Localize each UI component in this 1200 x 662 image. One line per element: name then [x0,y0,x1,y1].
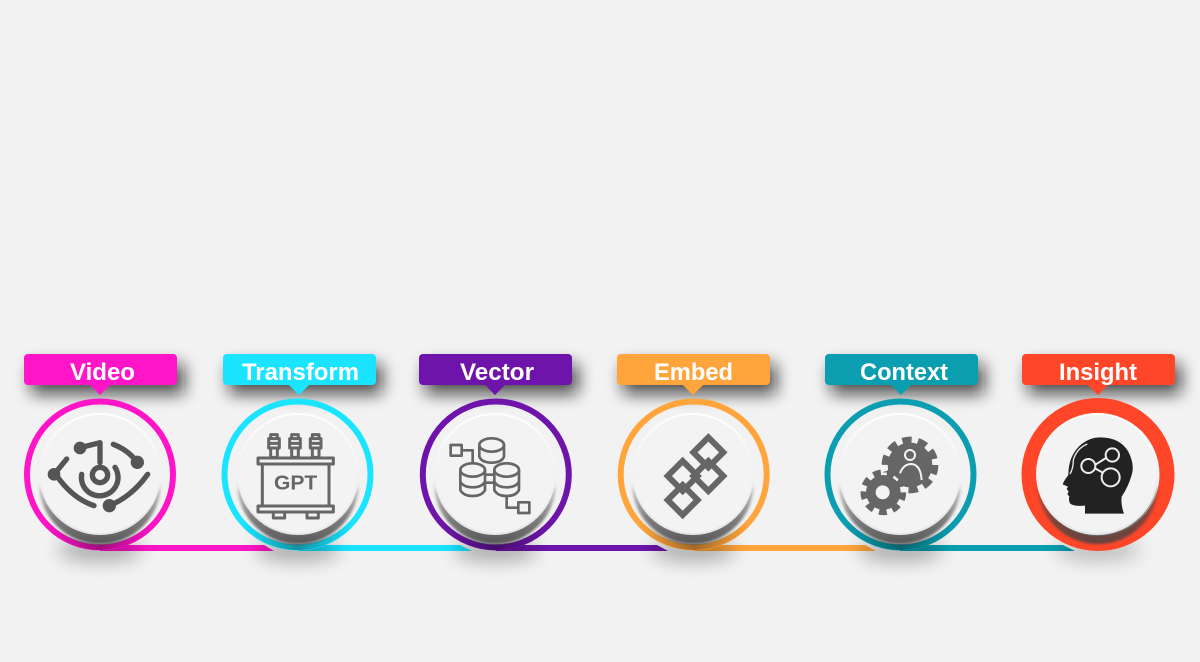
label: Vector: Vector [460,359,534,386]
step: Vector [419,354,578,561]
step: Embed [617,354,776,561]
icon: GPT transformer: GPT [274,471,318,494]
label: Insight: Insight [1059,359,1137,386]
icon: gears with person [863,440,935,512]
connector: magenta line [100,545,274,551]
step: Context [825,354,984,561]
label: Video: Video [70,359,135,386]
step: Transform [223,354,382,561]
connector: cyan line [298,545,472,551]
connector: orange line [694,545,876,551]
label: Transform: Transform [242,359,359,386]
step: Insight [1022,354,1181,561]
connector: purple line [496,545,668,551]
label: Embed: Embed [654,359,733,386]
icon: eye [48,442,148,512]
step: Video [24,354,184,561]
icon: chain of diamonds [668,437,723,515]
label: Context: Context [860,359,948,386]
icon: head with nodes [1063,437,1133,514]
icon: GPT transformer [258,435,333,518]
icon: databases [451,438,529,513]
connector: teal line [900,545,1075,551]
